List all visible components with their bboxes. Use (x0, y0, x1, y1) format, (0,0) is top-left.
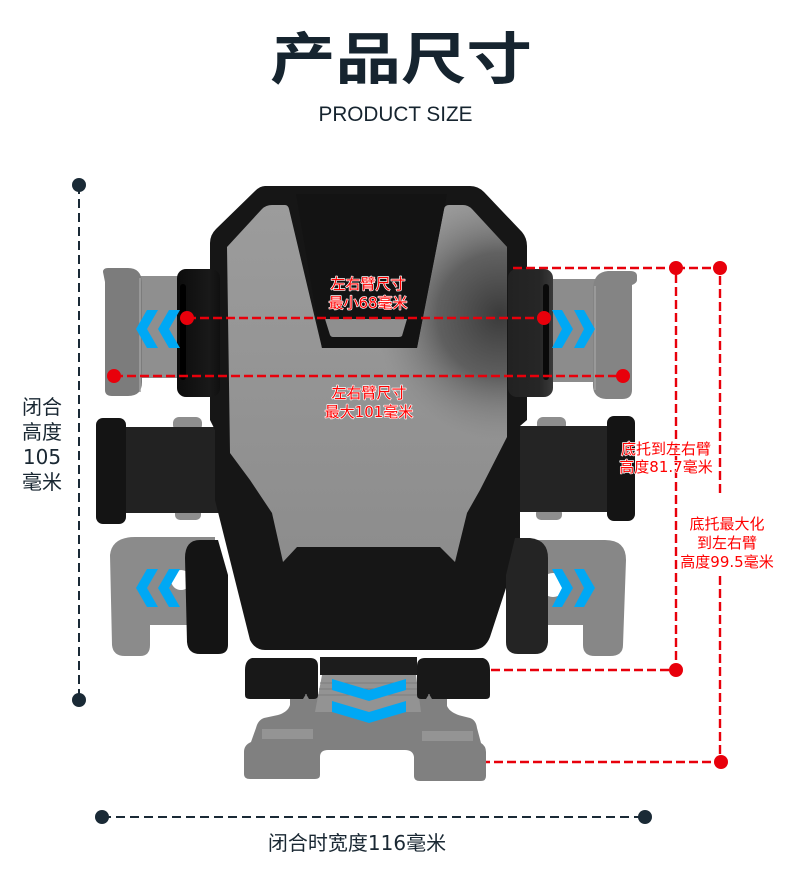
middle left black arm (96, 418, 220, 524)
blue right chevrons upper (552, 310, 595, 348)
height 81.7 dimension line (490, 261, 683, 677)
left height label: 105 (23, 445, 61, 469)
upper left black clip (177, 269, 220, 397)
left height label: 毫米 (22, 470, 62, 494)
bottom black clamps (245, 657, 490, 699)
label: base to arm height: 底托到左右臂 (621, 440, 711, 458)
upper right black clip (508, 269, 553, 397)
lower right gray arm (530, 540, 626, 656)
lower left gray arm (110, 537, 215, 656)
middle right black arm (515, 416, 635, 521)
left height label (22, 395, 62, 494)
label: maximum arm size: 最大101毫米 (325, 403, 413, 421)
title: 产品尺寸 (270, 15, 532, 96)
label: maximum arm size: 左右臂尺寸 (331, 384, 407, 402)
left height label: 闭合 (22, 395, 62, 419)
subtitle: PRODUCT SIZE (318, 103, 472, 126)
blue down chevrons (332, 679, 406, 723)
bottom width label: 闭合时宽度116毫米 (268, 831, 446, 855)
bottom width dimension line (95, 810, 652, 824)
label: max base to arm height: 高度99.5毫米 (680, 553, 774, 571)
label: minimum arm size (328, 275, 408, 312)
phone holder body (210, 186, 527, 650)
height 99.5 dimension line (486, 261, 728, 769)
left height label: 高度 (22, 420, 62, 444)
label: minimum arm size: 左右臂尺寸 (330, 275, 406, 293)
min width dimension line (180, 311, 551, 325)
blue left chevrons lower (136, 569, 180, 607)
max width dimension line (107, 369, 630, 383)
label: maximum arm size (325, 384, 413, 421)
label: base to arm height (619, 440, 713, 476)
label: minimum arm size: 最小68毫米 (328, 294, 408, 312)
top black trapezoid with notch (296, 194, 447, 348)
label: base to arm height: 高度81.7毫米 (619, 458, 713, 476)
label: max base to arm height: 到左右臂 (697, 534, 757, 552)
left height dimension line (72, 178, 86, 707)
upper left gray arm (103, 268, 186, 396)
blue right chevrons lower (552, 569, 595, 607)
blue left chevrons upper (136, 310, 180, 348)
gray panel (227, 205, 507, 562)
label: max base to arm height (680, 515, 774, 571)
upper right gray arm (548, 271, 637, 399)
label: max base to arm height: 底托最大化 (689, 515, 765, 533)
gray extended base (244, 675, 486, 781)
lower right black clip (506, 538, 548, 654)
lower left black clip (185, 540, 228, 654)
gray stubs (173, 417, 566, 520)
